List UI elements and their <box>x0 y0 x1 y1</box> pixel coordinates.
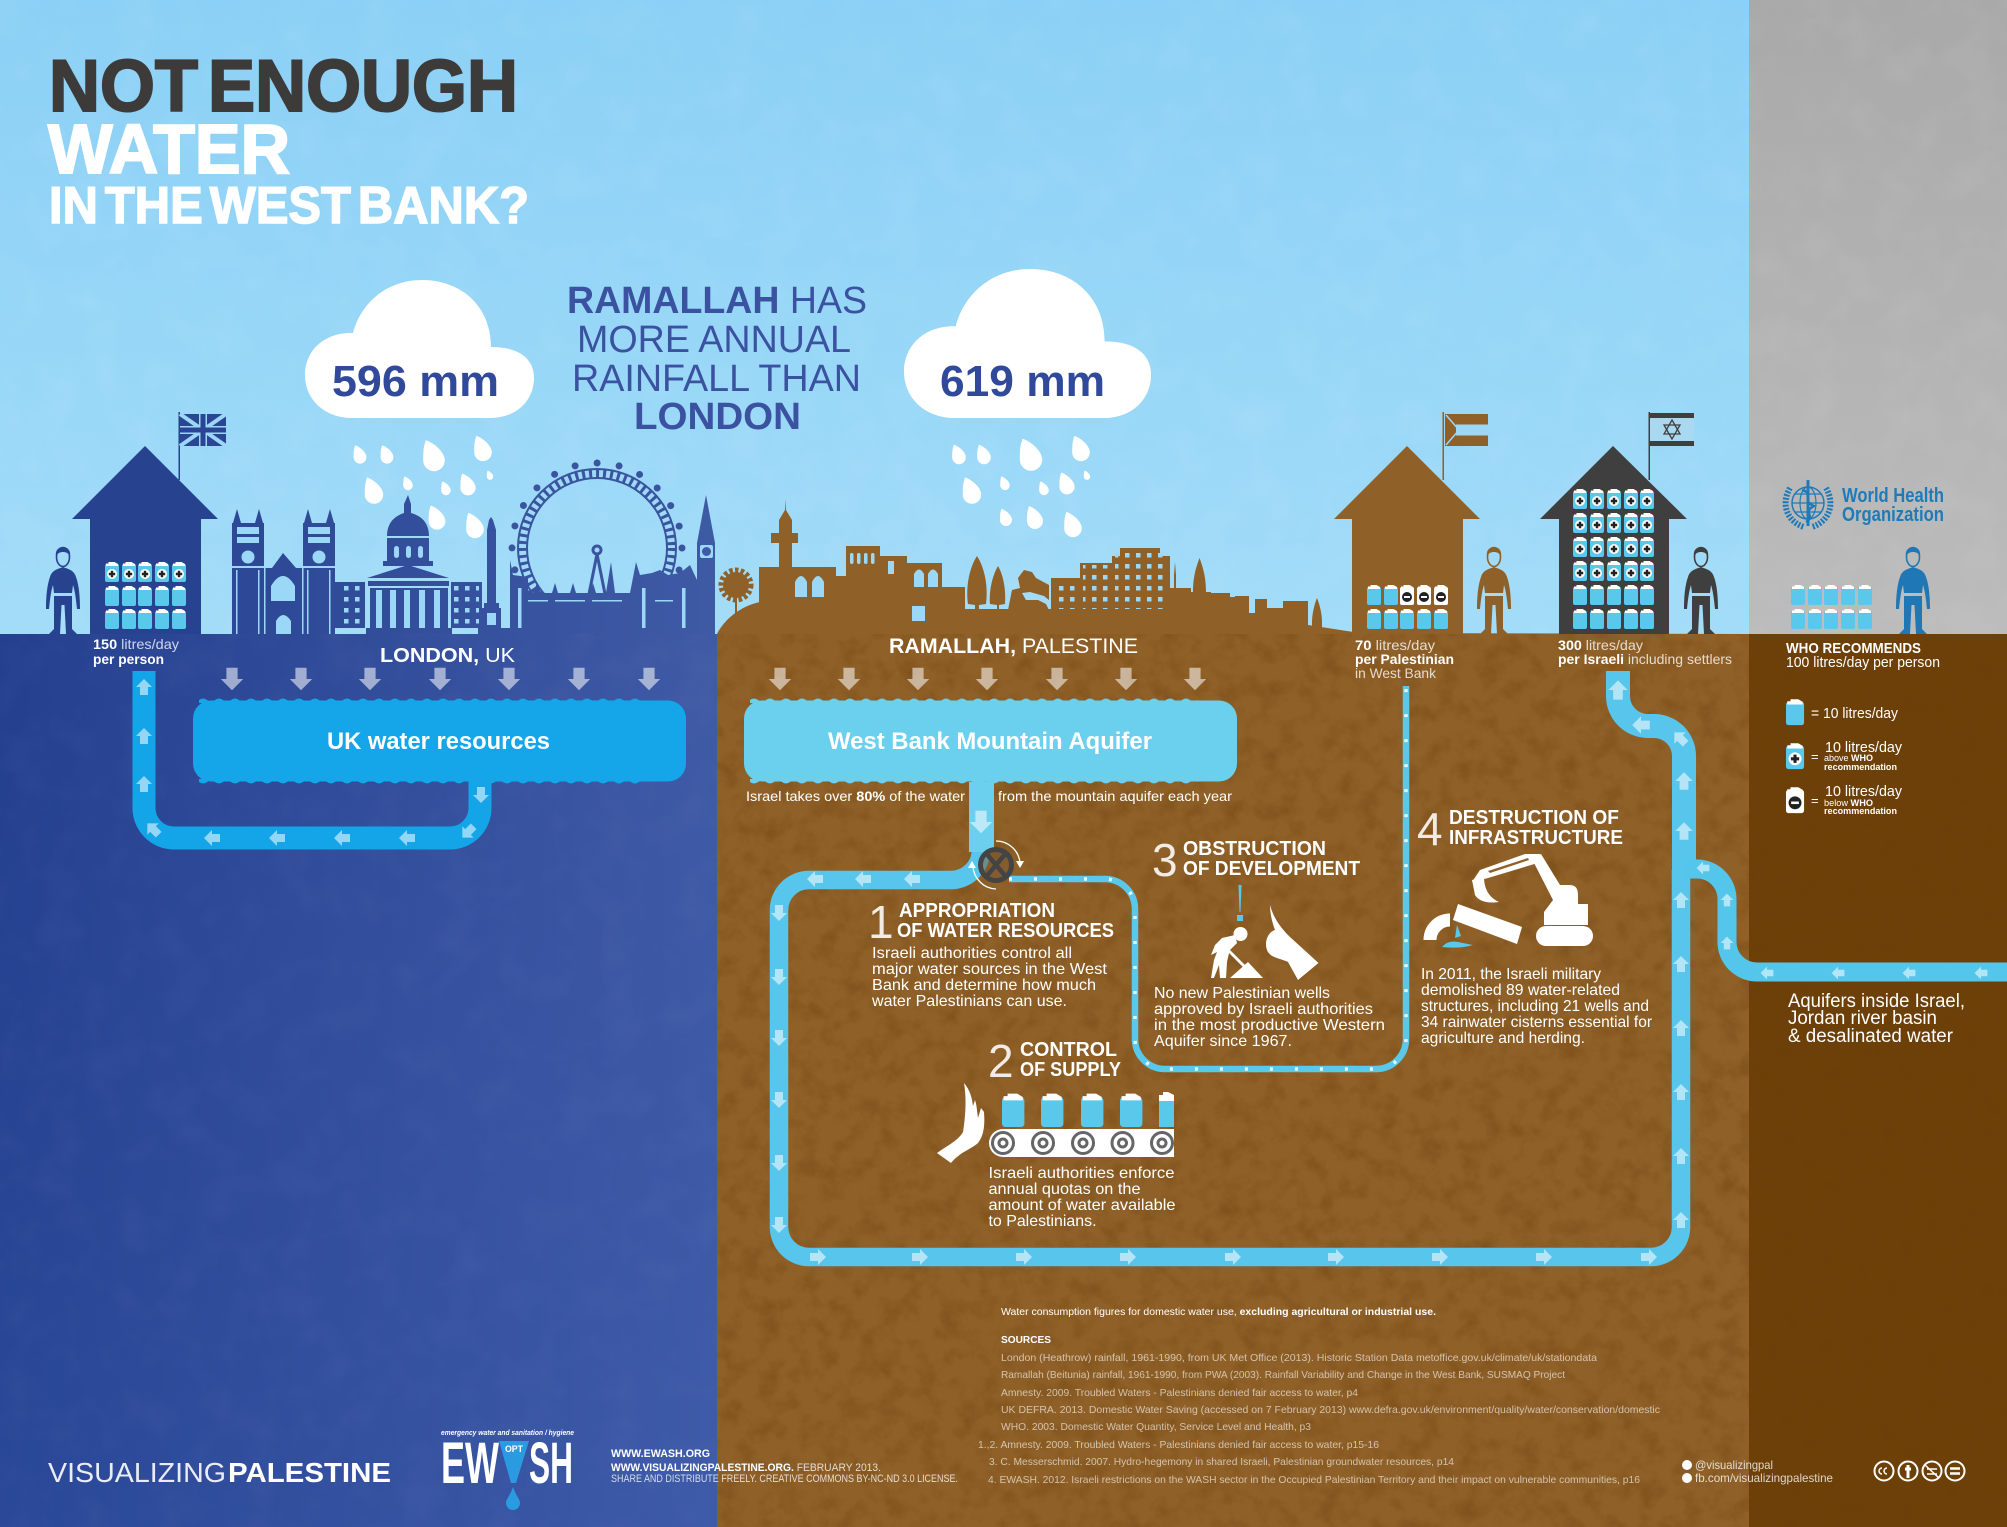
label: 70 litres: 70 litres/day <box>1355 637 1435 653</box>
note and sources: 3. C. Messerschmid. 2007. Hydro-hegemony in shared Israeli, Palestinian groundwater resources, p14 <box>989 1456 1454 1468</box>
cloud: London rainfall <box>305 280 534 418</box>
Ramallah skyline <box>723 499 1322 628</box>
pipe: thin Palestinian supply <box>1009 686 1406 1069</box>
cloud: London rainfall: 596 mm <box>332 357 499 406</box>
Houses of Parliament and Big Ben <box>510 495 715 634</box>
logo: EWASH: SH <box>529 1431 573 1496</box>
sky background <box>0 0 1749 640</box>
icon: stop hand <box>1266 905 1318 980</box>
headline: Ramallah has more rainfall: RAINFALL THAN <box>572 358 861 400</box>
note and sources: London (Heathrow) rainfall, 1961-1990, from UK Met Office (2013). Historic Station Data metoffice.gov.uk/climate/uk/stationdata <box>1001 1352 1597 1364</box>
logo: World Health Organization: World Health <box>1842 485 1944 507</box>
pipe: UK supply <box>136 671 489 846</box>
title <box>48 46 529 235</box>
headline: Ramallah has more rainfall <box>567 280 867 438</box>
label: WHO recommends <box>1786 640 1940 671</box>
section 4: destruction of infrastructure: INFRASTRUCTURE <box>1449 827 1623 849</box>
section 3: obstruction of development: approved by Israeli authorities <box>1154 1001 1373 1018</box>
logo: EWASH: OPT <box>505 1444 523 1454</box>
London skyline <box>232 463 715 634</box>
note and sources: SOURCES <box>1001 1334 1051 1346</box>
icon: conveyor of water cans <box>989 1092 1174 1157</box>
label: London, UK: LONDON, UK <box>380 645 516 667</box>
section 4: destruction of infrastructure: 34 rainwater cisterns essential for <box>1421 1014 1653 1031</box>
legend: jerrycans: recommendation <box>1824 762 1897 773</box>
section 2: control of supply: annual quotas on the <box>988 1181 1141 1198</box>
grey WHO panel background <box>1749 0 2007 640</box>
tree <box>723 572 749 614</box>
flag: Palestine <box>1445 414 1488 446</box>
section 2: control of supply: Israeli authorities enforce <box>988 1165 1175 1182</box>
section 2: control of supply: OF SUPPLY <box>1020 1059 1122 1081</box>
label: aquifers inside Israel: Jordan river basin <box>1788 1008 1937 1029</box>
section 2: control of supply <box>937 1035 1176 1230</box>
section 1: appropriation: water Palestinians can use. <box>871 993 1067 1010</box>
brown ground: West Bank <box>717 602 1749 1527</box>
old city wall <box>1170 558 1322 628</box>
credits: WWW.VISUALIZINGPALESTINE.ORG. FEBRUARY 2013. <box>611 1462 881 1474</box>
legend: jerrycans: = 10 litres/day <box>1811 705 1898 722</box>
cypress trees and lion statue <box>967 556 1049 610</box>
person: Palestinian <box>1477 547 1511 634</box>
credits: WWW.EWASH.ORG <box>611 1448 710 1460</box>
section 1: appropriation <box>868 896 1114 1010</box>
aquifer: West Bank Mountain Aquifer: West Bank Mountain Aquifer <box>828 728 1152 755</box>
note and sources <box>978 1306 1660 1486</box>
logo: EWASH: EW <box>441 1431 499 1496</box>
logo: EWASH <box>441 1428 574 1510</box>
note and sources: Water consumption figures for domestic water use, excluding agricultural or industrial use. <box>1001 1306 1436 1318</box>
label: 70 litres: per Palestinian <box>1355 651 1454 667</box>
legend: jerrycans: below WHO <box>1824 798 1873 809</box>
legend: jerrycans: 10 litres/day <box>1825 739 1902 756</box>
section 3: obstruction of development: OF DEVELOPMENT <box>1183 858 1360 880</box>
label: 150 litres: 150 litres/day <box>93 636 179 652</box>
apartment blocks <box>1051 548 1170 620</box>
legend: jerrycans: 10 litres/day <box>1825 783 1902 800</box>
note and sources: Amnesty. 2009. Troubled Waters - Palestinians denied fair access to water, p4 <box>1001 1387 1358 1399</box>
section 3: obstruction of development <box>1152 834 1385 1050</box>
title: IN THE WEST BANK? <box>49 177 529 235</box>
caption: Israel takes over 80% <box>746 788 1232 804</box>
icon: exclamation mark <box>1237 885 1243 921</box>
aquifer: UK water resources <box>193 698 686 784</box>
note and sources: 1.,2. Amnesty. 2009. Troubled Waters - Palestinians denied fair access to water, p15-16 <box>978 1439 1379 1451</box>
title: WATER <box>48 110 290 188</box>
icon: excavator demolishing a pipe <box>1430 854 1593 948</box>
icon: hand stopping conveyor <box>937 1083 984 1163</box>
rain infiltration arrows: London <box>221 668 660 690</box>
section 1: appropriation: OF WATER RESOURCES <box>897 920 1114 942</box>
house: London, 150 litres <box>72 412 226 634</box>
note and sources: 4. EWASH. 2012. Israeli restrictions on the WASH sector in the Occupied Palestinian Territory and their impact on vulnerable communities, p16 <box>988 1474 1640 1486</box>
logo: EWASH: emergency water and sanitation / hygiene <box>441 1428 574 1437</box>
title: NOT ENOUGH <box>49 46 518 127</box>
aquifer: UK water resources: UK water resources <box>327 728 550 755</box>
dark brown ground: WHO panel <box>1749 634 2007 1527</box>
house: Palestinian, 70 litres <box>1334 412 1488 634</box>
label: 70 litres: in West Bank <box>1355 665 1437 681</box>
headline: Ramallah has more rainfall: RAMALLAH HAS <box>567 280 867 322</box>
flag: Israel <box>1650 413 1694 446</box>
label: aquifers inside Israel <box>1788 991 1965 1047</box>
section 2: control of supply: amount of water available <box>988 1197 1176 1214</box>
section 4: destruction of infrastructure: agriculture and herding. <box>1421 1030 1585 1047</box>
National Gallery <box>335 495 482 634</box>
section 1: appropriation: Israeli authorities control all <box>872 945 1072 962</box>
label: 70 litres <box>1355 637 1454 681</box>
logo: Visualizing Palestine: PALESTINE <box>228 1457 391 1488</box>
label: Ramallah, Palestine: RAMALLAH, PALESTINE <box>889 635 1138 658</box>
label: 150 litres <box>93 636 179 667</box>
legend: jerrycans: = <box>1811 793 1819 808</box>
rain infiltration arrows: Ramallah <box>769 668 1206 690</box>
section 2: control of supply: to Palestinians. <box>988 1213 1096 1230</box>
section 1: appropriation: APPROPRIATION <box>899 900 1055 922</box>
London Eye <box>512 463 682 633</box>
note and sources: WHO. 2003. Domestic Water Quantity, Service Level and Health, p3 <box>1001 1421 1311 1433</box>
caption: Israel takes over 80%: Israel takes over 80% of the water <box>746 788 965 804</box>
section 3: obstruction of development: 3 <box>1152 834 1178 886</box>
label: WHO recommends: 100 litres/day per person <box>1786 654 1940 671</box>
Nelson's column <box>478 517 510 634</box>
icon: worker digging <box>1211 927 1263 978</box>
label: aquifers inside Israel: & desalinated water <box>1788 1026 1954 1047</box>
label: aquifers inside Israel: Aquifers inside Israel, <box>1788 991 1965 1012</box>
label: 300 litres: per Israeli including settlers <box>1558 651 1732 667</box>
section 3: obstruction of development: No new Palestinian wells <box>1154 985 1330 1002</box>
rain: London <box>354 436 493 538</box>
logo: Visualizing Palestine: VISUALIZING <box>48 1457 226 1488</box>
old town buildings <box>836 546 965 621</box>
legend: jerrycans: above WHO <box>1824 753 1873 764</box>
WHO recommended jerrycans <box>1791 585 1872 629</box>
headline: Ramallah has more rainfall: MORE ANNUAL <box>577 319 851 361</box>
person: London <box>46 547 80 634</box>
section 4: destruction of infrastructure: demolished 89 water-related <box>1421 982 1620 999</box>
logo: Visualizing Palestine <box>48 1457 391 1488</box>
icon: valve <box>968 841 1024 889</box>
section 1: appropriation: Bank and determine how much <box>872 977 1096 994</box>
house: Israeli, 300 litres <box>1540 412 1694 634</box>
person: Israeli <box>1684 547 1718 634</box>
cloud: Ramallah rainfall <box>904 269 1151 418</box>
section 4: destruction of infrastructure: 4 <box>1417 803 1443 855</box>
logo: World Health Organization <box>1786 480 1944 527</box>
creative commons icons <box>1874 1462 1964 1480</box>
social links: fb.com/visualizingpalestine <box>1695 1471 1833 1485</box>
legend: jerrycans: recommendation <box>1824 806 1897 817</box>
headline: Ramallah has more rainfall: LONDON <box>634 396 801 438</box>
section 1: appropriation: 1 <box>868 896 894 948</box>
section 1: appropriation: major water sources in the West <box>872 961 1108 978</box>
blue ground: London <box>0 634 717 1527</box>
aquifer: West Bank Mountain Aquifer <box>744 698 1237 784</box>
pipe: aquifers inside Israel branch <box>1684 862 2007 979</box>
section 2: control of supply: 2 <box>988 1035 1014 1087</box>
section 4: destruction of infrastructure: In 2011, the Israeli military <box>1421 966 1601 983</box>
section 3: obstruction of development: OBSTRUCTION <box>1183 838 1326 860</box>
section 4: destruction of infrastructure <box>1417 803 1653 1047</box>
section 4: destruction of infrastructure: DESTRUCTION OF <box>1449 807 1619 829</box>
label: 300 litres: 300 litres/day <box>1558 637 1643 653</box>
flag: UK <box>180 414 226 446</box>
mosque <box>759 499 836 615</box>
legend: jerrycans: = <box>1811 749 1819 764</box>
social links: @visualizingpal <box>1695 1458 1773 1472</box>
section 3: obstruction of development: Aquifer since 1967. <box>1154 1033 1292 1050</box>
section 2: control of supply: CONTROL <box>1020 1039 1117 1061</box>
note and sources: UK DEFRA. 2013. Domestic Water Saving (accessed on 7 February 2013) www.defra.gov.uk/environment/quality/water/conservation/domestic <box>1001 1404 1660 1416</box>
credits <box>611 1448 958 1485</box>
rain: Ramallah <box>952 436 1090 537</box>
section 4: destruction of infrastructure: structures, including 21 wells and <box>1421 998 1649 1015</box>
logo: World Health Organization: Organization <box>1842 504 1944 526</box>
caption: Israel takes over 80%: from the mountain aquifer each year <box>998 788 1232 804</box>
pipe: main Israeli diversion loop <box>771 671 1693 1265</box>
Westminster Abbey <box>232 509 335 634</box>
label: WHO recommends: WHO RECOMMENDS <box>1786 640 1921 657</box>
label: 300 litres <box>1558 637 1732 667</box>
credits: SHARE AND DISTRIBUTE FREELY. CREATIVE COMMONS BY-NC-ND 3.0 LICENSE. <box>611 1473 958 1485</box>
section 3: obstruction of development: in the most productive Western <box>1154 1017 1385 1034</box>
social links <box>1682 1458 1833 1485</box>
note and sources: Ramallah (Beitunia) rainfall, 1961-1990, from PWA (2003). Rainfall Variability and Change in the West Bank, SUSMAQ Project <box>1001 1369 1565 1381</box>
cloud: Ramallah rainfall: 619 mm <box>940 357 1105 406</box>
person: WHO <box>1896 547 1930 634</box>
legend: jerrycans <box>1786 699 1902 817</box>
label: 150 litres: per person <box>93 651 164 667</box>
